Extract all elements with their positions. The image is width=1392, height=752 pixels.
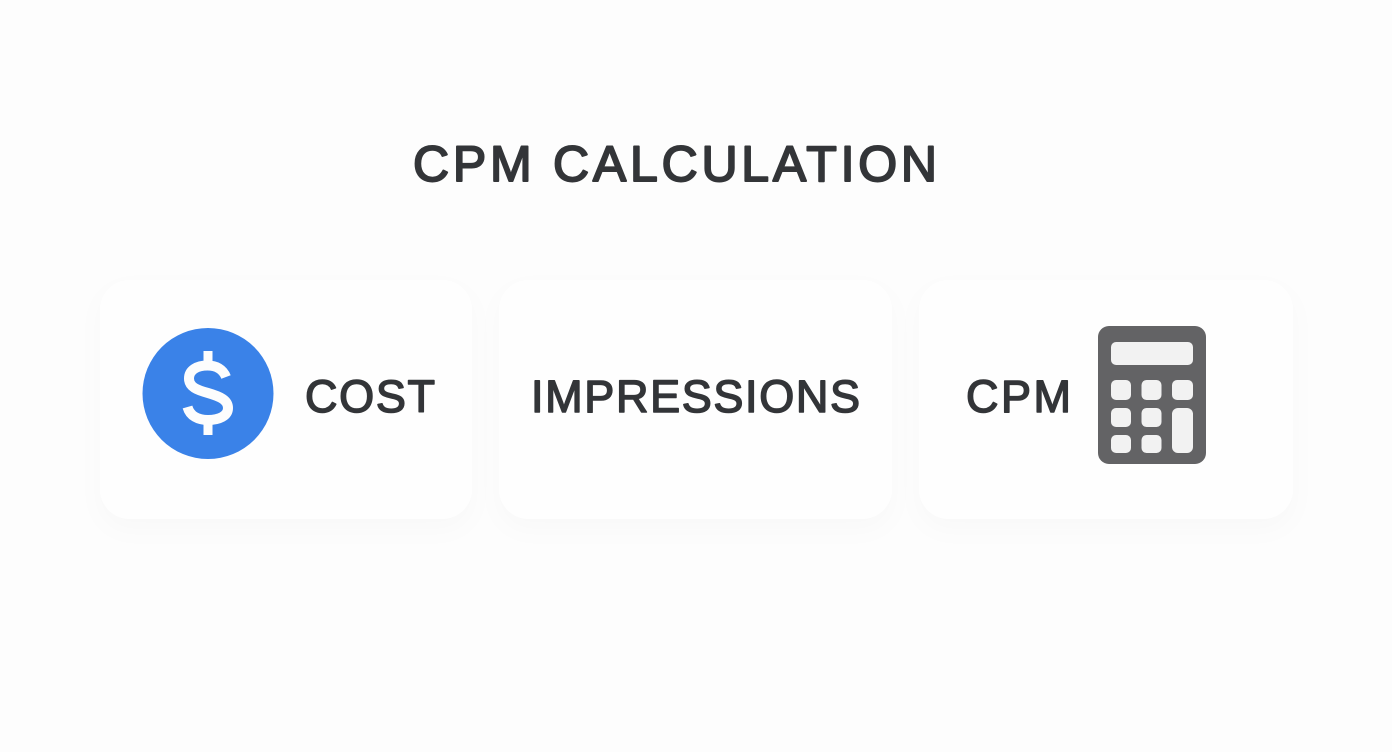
icon: dollar coin — [142, 328, 274, 459]
label: cpm: CPM — [966, 371, 1071, 422]
label: impressions: IMPRESSIONS — [531, 371, 860, 422]
panel: cost — [100, 280, 472, 519]
panel: cpm — [919, 280, 1293, 519]
title: CPM CALCULATION — [413, 136, 937, 192]
panel: impressions — [499, 280, 892, 519]
label: cost: COST — [305, 371, 435, 422]
icon: calculator — [1098, 326, 1206, 464]
